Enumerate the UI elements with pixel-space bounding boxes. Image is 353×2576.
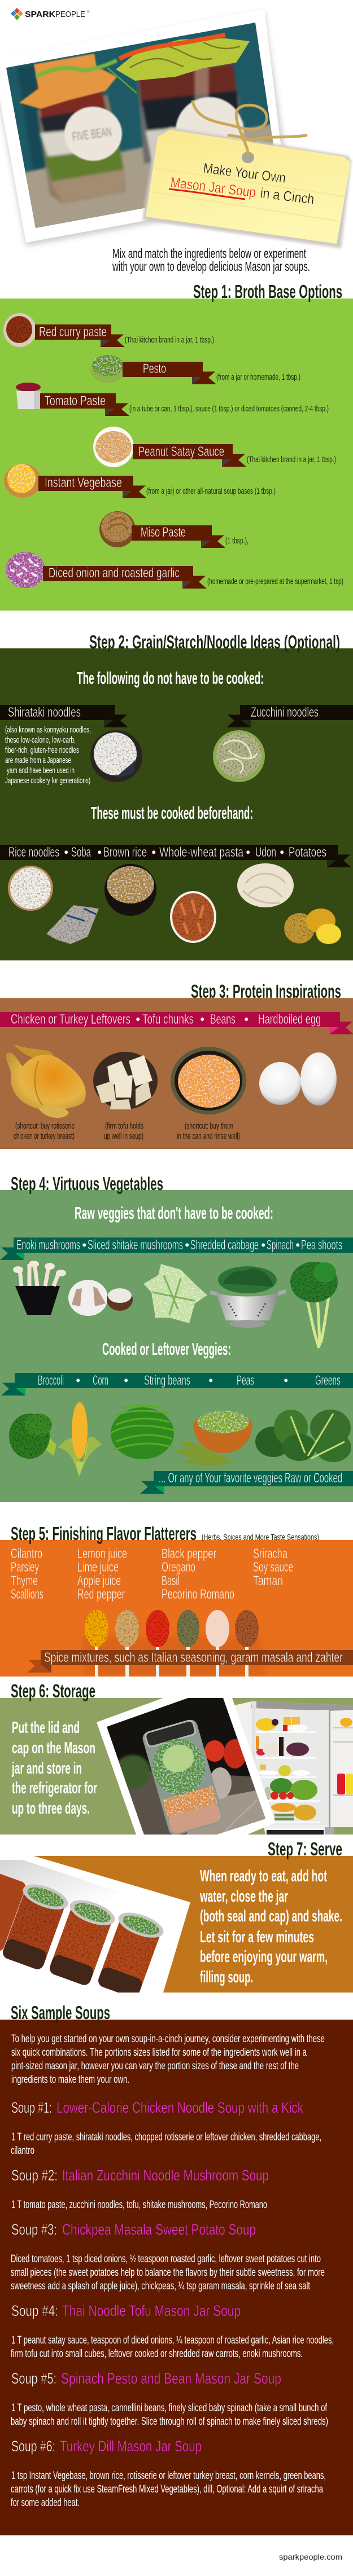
jar — [50, 1900, 115, 1985]
shirataki description: these low-calorie, low-carb, — [5, 735, 76, 745]
logo: SparkPeople: ® — [87, 10, 90, 14]
icon: potatoes — [284, 909, 341, 944]
ribbon: cooked grains list: • — [246, 845, 250, 860]
chicken caption: (shortcut: buy rotisserie — [15, 1121, 75, 1131]
hero photo: two Mason jars in a polaroid frame: FIVE BEAN — [71, 125, 112, 144]
chicken caption: chicken or turkey breast) — [14, 1131, 75, 1141]
ribbon: protein list: • — [200, 1012, 204, 1027]
flavor list column 1: Thyme — [11, 1573, 38, 1588]
ribbon: miso paste: (1 tbsp.), — [225, 536, 249, 546]
ribbon: raw veggies list: Enoki mushrooms — [16, 1237, 80, 1253]
storage instructions: jar and store in — [11, 1759, 82, 1778]
logo: SparkPeople — [11, 8, 90, 20]
ribbon: instant vegebase: Instant Vegebase — [45, 475, 122, 490]
icon: peas bowl and pods — [175, 1411, 252, 1465]
ribbon: cooked grains list: • — [64, 845, 68, 860]
soup 5 — [11, 2370, 328, 2428]
icon: zucchini noodles plate — [213, 730, 265, 782]
tofu caption: (firm tofu holds — [105, 1121, 143, 1131]
panel: step 3 protein inspirations — [0, 998, 353, 1149]
ribbon: miso paste — [99, 511, 249, 548]
jar — [98, 1912, 164, 1993]
soup 1 — [11, 2099, 321, 2157]
flavor list column 4 — [253, 1546, 293, 1588]
right jar — [137, 62, 243, 169]
panel: step 1 broth base options — [0, 281, 353, 611]
icon: roast chicken — [6, 1045, 86, 1118]
heading: step 6: Step 6: Storage — [11, 1680, 95, 1701]
ribbon: cooked veggies list: Peas — [237, 1373, 254, 1388]
soup 5: Soup #5: — [11, 2370, 56, 2387]
spoons with spices — [82, 1610, 265, 1679]
soup 3: Soup #3: — [11, 2221, 57, 2238]
shirataki description: yam and have been used in — [7, 766, 75, 775]
ribbon: cooked grains list: Udon — [255, 845, 276, 860]
icon: tofu bowl — [93, 1052, 158, 1109]
icon: enoki mushrooms — [13, 1261, 66, 1315]
panel: step 4 virtuous vegetables — [0, 1173, 353, 1502]
flavor list column 2 — [77, 1546, 127, 1602]
shirataki description: Japanese cookery for generations) — [5, 776, 90, 785]
shirataki description: fiber-rich, gluten-free noodles — [5, 745, 79, 755]
icon: corn — [58, 1402, 102, 1477]
ribbon: peanut satay sauce: Peanut Satay Sauce — [138, 444, 224, 459]
soup 2: Soup #2: — [11, 2167, 58, 2184]
icon: udon noodles — [237, 863, 294, 907]
ribbon: protein list: Beans — [210, 1012, 236, 1027]
icon: shirataki bowl — [90, 730, 142, 782]
shirataki description: (also known as konnyaku noodles, — [5, 725, 91, 735]
soup 6: Soup #6: — [11, 2438, 55, 2455]
red underline — [169, 189, 245, 199]
soup 1: cilantro — [11, 2145, 34, 2157]
icon: beans bowl — [171, 1047, 246, 1114]
ribbon: red curry paste: Red curry paste — [39, 324, 107, 340]
soup 2 — [11, 2167, 269, 2211]
ribbon: instant vegebase — [4, 464, 276, 498]
ribbon: cooked grains list: Whole-wheat pasta — [159, 845, 243, 860]
jar — [2, 1884, 68, 1969]
icon: red curry paste — [3, 313, 36, 347]
soup 2: Italian Zucchini Noodle Mushroom Soup — [62, 2167, 269, 2184]
ribbon: protein list: Tofu chunks — [142, 1012, 194, 1027]
ribbon: cooked grains list: • — [151, 845, 156, 860]
serve instructions: water, close the jar — [199, 1888, 288, 1906]
photo: jars of soup — [0, 1856, 190, 2000]
logo: SparkPeople: PEOPLE — [55, 10, 85, 19]
tofu caption — [104, 1121, 143, 1141]
icon: spinach colander — [210, 1266, 286, 1328]
flavor list column 2: Red pepper — [77, 1587, 125, 1602]
intro paragraph — [11, 2033, 325, 2086]
icon: pea shoots — [290, 1262, 338, 1348]
storage instructions: the refrigerator for — [12, 1779, 97, 1797]
beans caption: in the can and rinse well) — [177, 1131, 240, 1141]
ribbon: zucchini noodles: Zucchini noodles — [251, 705, 319, 720]
heading: step 4: Step 4: Virtuous Vegetables — [11, 1173, 163, 1194]
chicken caption — [14, 1121, 75, 1141]
ribbon: cooked veggies list: • — [208, 1373, 213, 1388]
heading line: Make Your Own: Make Your Own — [202, 160, 287, 186]
ribbon: any favorite veggies — [140, 1471, 353, 1494]
flavor list column 1: Cilantro — [11, 1546, 42, 1561]
ribbon: protein list: • — [136, 1012, 140, 1027]
storage instructions: cap on the Mason — [12, 1739, 95, 1757]
beans caption — [177, 1121, 240, 1141]
flavor list column 3: Basil — [162, 1573, 180, 1588]
icon: eggs — [259, 1052, 337, 1105]
storage instructions: Put the lid and — [12, 1719, 80, 1737]
ribbon: cooked veggies list: Broccoli — [38, 1373, 64, 1388]
ribbon: protein list: Hardboiled egg — [258, 1012, 321, 1027]
tofu caption: up well in soup) — [104, 1131, 143, 1141]
icon: tag hole — [242, 152, 254, 163]
icon: soba bundle — [46, 905, 99, 944]
heading: step 5: Step 5: Finishing Flavor Flatterers — [11, 1523, 197, 1544]
flavor list column 3 — [162, 1546, 234, 1602]
ribbon: cooked grains list: Potatoes — [289, 845, 326, 860]
ribbon: cooked grains list: Brown rice — [103, 845, 147, 860]
serve instructions — [199, 1867, 342, 1986]
icon: peanut sauce bowl — [93, 427, 134, 467]
flavor list column 1 — [11, 1546, 43, 1602]
ribbon: cooked grains list: Rice noodles — [8, 845, 59, 860]
ribbon: shirataki noodles — [0, 705, 128, 727]
ribbon: shirataki noodles: Shirataki noodles — [8, 705, 81, 720]
fridge food — [256, 1717, 353, 1820]
flavor list column 1: Scallions — [11, 1587, 43, 1602]
intro text — [112, 246, 310, 274]
ribbon: zucchini noodles — [226, 705, 353, 727]
ribbon: cooked veggies list: • — [124, 1373, 128, 1388]
flavor list column 1: Parsley — [11, 1560, 39, 1575]
logo: SparkPeople: SPARK — [25, 10, 55, 19]
icon: broccoli — [9, 1414, 56, 1459]
panel: step 5 finishing flavor flatterers — [0, 1523, 353, 1679]
serve instructions: filling soup. — [200, 1968, 253, 1986]
icon: diced onion — [6, 552, 45, 588]
ribbon: diced onion and roasted garlic — [6, 552, 343, 589]
ribbon: pesto: (from a jar or homemade, 1 tbsp.) — [216, 372, 300, 382]
icon: shitake mushrooms — [68, 1280, 133, 1316]
ribbon: cooked grains list: • — [280, 845, 284, 860]
ribbon: raw veggies list — [0, 1237, 353, 1260]
soup 6 — [11, 2438, 326, 2509]
ribbon: raw veggies list: • — [261, 1237, 265, 1253]
ribbon: protein list — [0, 1012, 353, 1034]
ribbon: tomato paste: Tomato Paste — [45, 393, 106, 409]
ribbon: protein list: • — [244, 1012, 249, 1027]
icon: collard greens — [255, 1410, 351, 1462]
ribbon: spice mixtures — [27, 1650, 353, 1673]
soup 6: Turkey Dill Mason Jar Soup — [60, 2438, 202, 2455]
flavor list column 3: Pecorino Romano — [162, 1587, 234, 1602]
ribbon: raw veggies list: • — [82, 1237, 86, 1253]
photo: Mason jar salad — [97, 1698, 276, 1837]
subheading: cooked veggies: Cooked or Leftover Veggies: — [102, 1339, 231, 1359]
ribbon: raw veggies list: • — [295, 1237, 300, 1253]
flavor list column 2: Apple juice — [77, 1573, 121, 1588]
icon: brown rice bowl — [104, 864, 156, 916]
soup 1: Soup #1: — [11, 2099, 52, 2116]
icon: tomato paste cup — [16, 383, 41, 409]
panel: step 2 grain starch noodle ideas — [0, 631, 353, 960]
footer: sparkpeople.com: sparkpeople.com — [279, 2552, 342, 2561]
soup 4: Soup #4: — [11, 2302, 58, 2319]
shirataki description: are made from a Japanese — [5, 756, 71, 765]
flavor list column 3: Black pepper — [162, 1546, 216, 1561]
ribbon: pesto — [90, 355, 300, 384]
ribbon: cooked grains list: • — [97, 845, 102, 860]
ribbon: cooked grains list: Soba — [71, 845, 91, 860]
ribbon: raw veggies list: Shredded cabbage — [190, 1237, 259, 1253]
icon: penne pasta bowl — [170, 891, 216, 943]
ribbon: cooked veggies list: String beans — [144, 1373, 190, 1388]
intro paragraph: ingredients to make them your own. — [11, 2074, 129, 2086]
icon: shredded cabbage — [143, 1264, 207, 1323]
ribbon: raw veggies list: Sliced shitake mushrooms — [88, 1237, 183, 1253]
ribbon: pesto: Pesto — [143, 361, 166, 376]
ribbon: diced onion and roasted garlic: Diced onion and roasted garlic — [49, 565, 180, 581]
heading line: Mason Jar Soup: Mason Jar Soup — [169, 174, 257, 200]
heading line: in a Cinch: in a Cinch — [259, 185, 315, 208]
storage instructions — [11, 1719, 97, 1818]
title tag: Make Your Own Mason Jar Soup in a Cinch — [142, 102, 351, 248]
icon: open refrigerator — [234, 1701, 353, 1835]
ribbon: red curry paste: (Thai kitchen brand in a jar, 1 tbsp.) — [125, 335, 214, 345]
ribbon: cooked veggies list — [1, 1373, 353, 1395]
shirataki description — [5, 725, 91, 785]
ribbon: red curry paste — [3, 313, 214, 347]
panel: step 6 storage — [0, 1680, 353, 1837]
icon: string beans — [110, 1406, 175, 1459]
ribbon: raw veggies list: • — [185, 1237, 189, 1253]
ribbon: cooked veggies list: • — [76, 1373, 80, 1388]
panel: six sample soups — [0, 2002, 353, 2535]
soup 6: for some added heat. — [11, 2497, 80, 2509]
heading: six sample soups: Six Sample Soups — [11, 2002, 110, 2023]
soup 4: Thai Noodle Tofu Mason Jar Soup — [62, 2302, 241, 2319]
ribbon: tomato paste — [16, 383, 329, 416]
panel: step 7 serve — [0, 1838, 353, 2000]
ribbon: cooked veggies list: Corn — [93, 1373, 108, 1388]
flavor list column 4: Sriracha — [253, 1546, 287, 1561]
ribbon: miso paste: Miso Paste — [141, 525, 186, 540]
ribbon: protein list: Chicken or Turkey Leftovers — [11, 1012, 130, 1027]
hero photo: two Mason jars in a polaroid frame — [0, 9, 291, 246]
icon: pesto — [90, 355, 125, 383]
storage instructions: up to three days. — [12, 1800, 90, 1818]
soup 3 — [11, 2221, 325, 2292]
soup 5: Spinach Pesto and Bean Mason Jar Soup — [61, 2370, 281, 2387]
ribbon: cooked grains list — [0, 845, 351, 867]
flavor list column 2: Lemon juice — [77, 1546, 127, 1561]
icon: twine — [193, 102, 306, 155]
ribbon: raw veggies list: Spinach — [267, 1237, 294, 1253]
icon: vegebase — [4, 464, 41, 498]
left jar — [36, 76, 125, 203]
soup 3: Chickpea Masala Sweet Potato Soup — [62, 2221, 256, 2238]
flavor list column 2: Lime juice — [77, 1560, 119, 1575]
ribbon: instant vegebase: (from a jar) or other all-natural soup bases (1 tbsp.) — [146, 486, 276, 496]
flavor list column 4: Soy sauce — [253, 1560, 293, 1575]
ribbon: peanut satay sauce — [93, 427, 336, 467]
flavor list column 4: Tamari — [253, 1573, 283, 1588]
flavor list column 3: Oregano — [162, 1560, 195, 1575]
jar — [0, 1873, 25, 1951]
beans caption: (shortcut: buy them — [185, 1121, 233, 1131]
ribbon: cooked veggies list: • — [284, 1373, 288, 1388]
icon: miso bowl — [99, 511, 136, 547]
icon: rice noodles — [8, 866, 53, 911]
soup 4 — [11, 2302, 334, 2360]
